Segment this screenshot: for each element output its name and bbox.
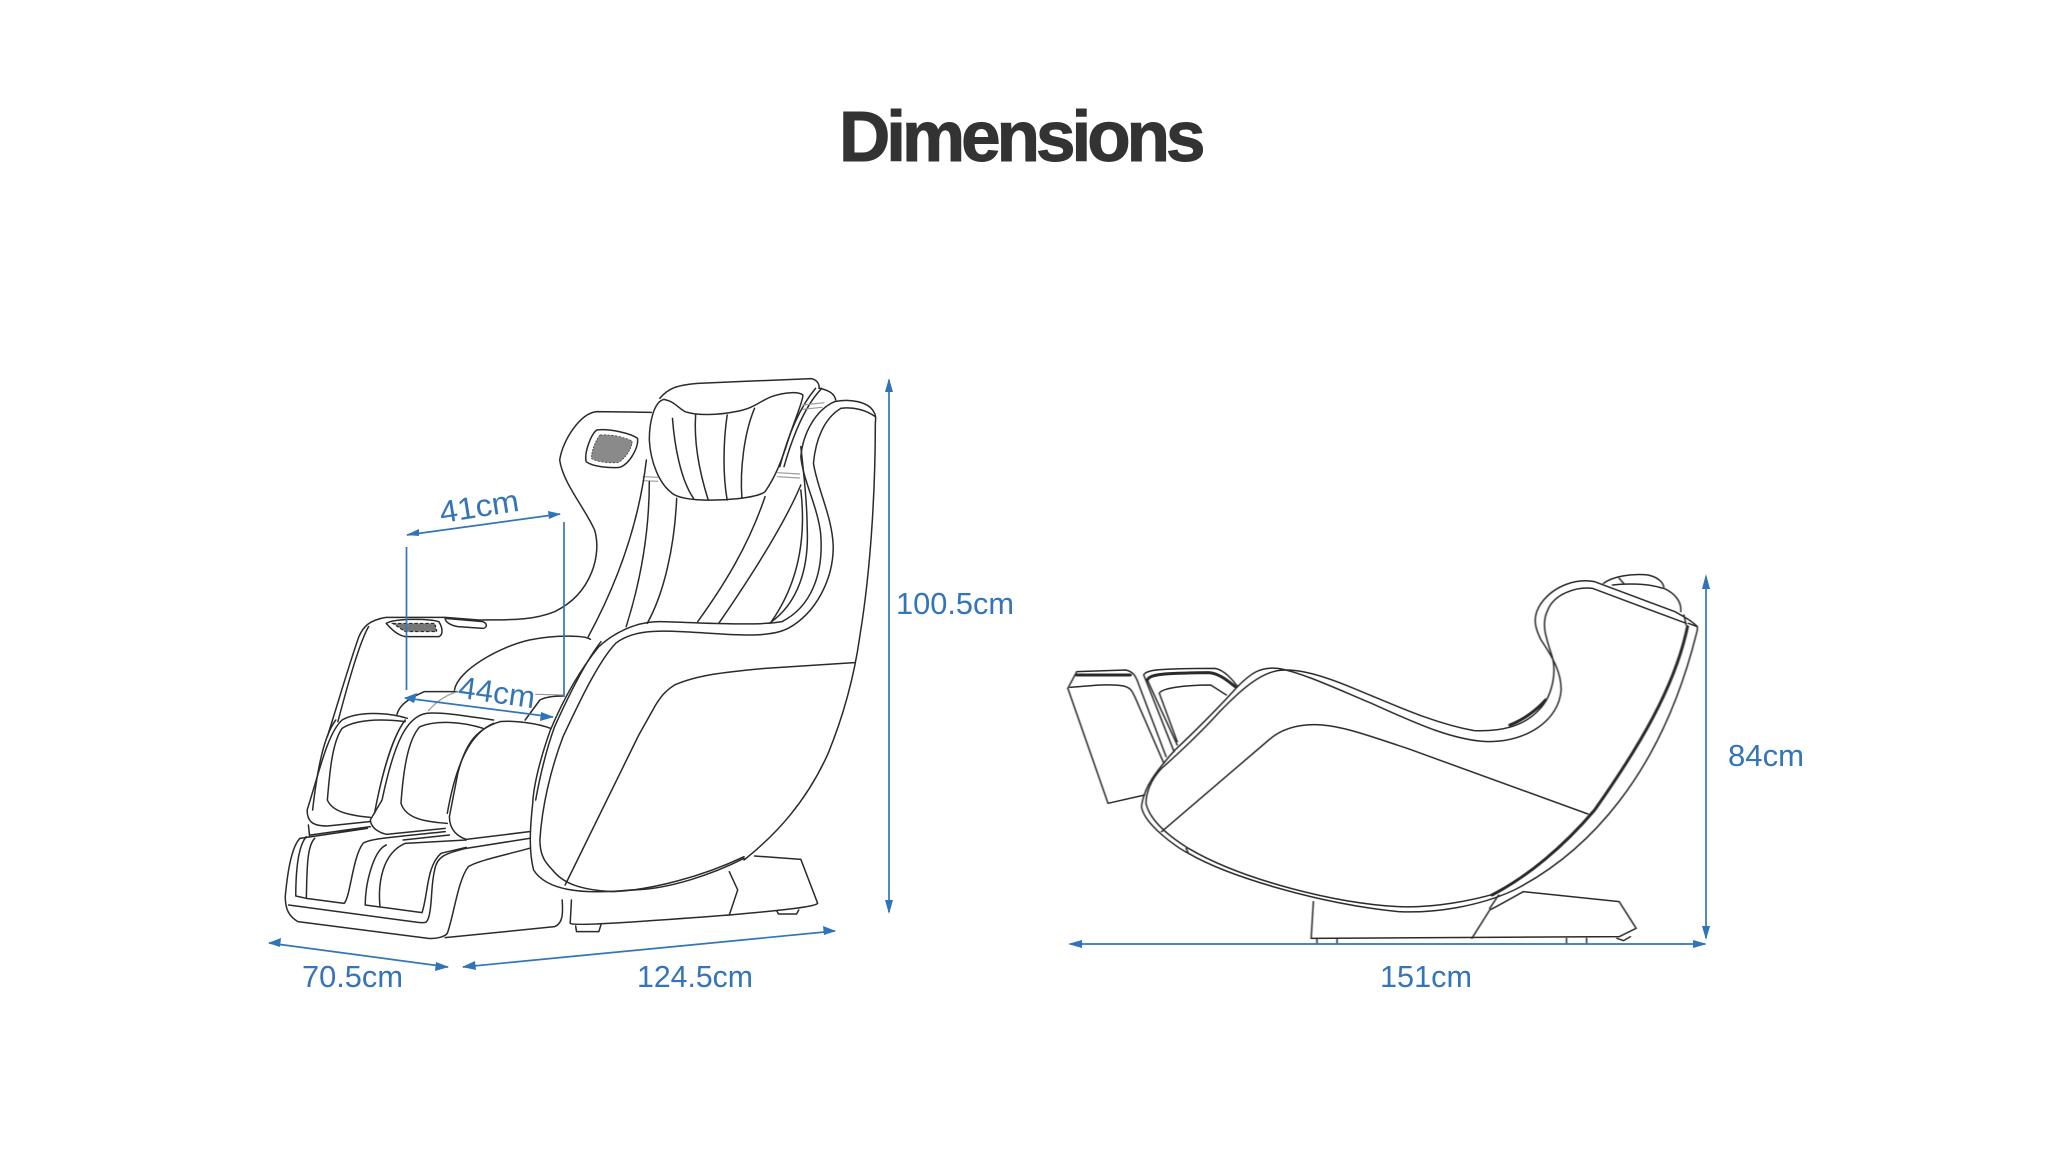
dimension: seat back width 41cm [406, 483, 564, 697]
dimension: front height 100.5cm [885, 378, 1014, 914]
dimension: reclined length 151cm [1068, 940, 1707, 994]
upper leg rests [307, 692, 563, 839]
dimension: width 70.5cm [268, 938, 449, 994]
head pillow [1604, 575, 1681, 612]
dimension: reclined length 151cm: 151cm [1380, 959, 1472, 994]
footrest [1068, 668, 1238, 803]
dimension: seat width 44cm [404, 670, 554, 721]
lower foot massager [285, 827, 529, 938]
dimension: reclined height 84cm: 84cm [1728, 738, 1804, 773]
side panel seam [1162, 725, 1588, 832]
dimension: front height 100.5cm: 100.5cm [896, 586, 1014, 621]
chair base and feet [445, 856, 818, 938]
shell outline [1142, 581, 1697, 912]
far side wing and armrest [327, 412, 651, 737]
headrest pillow [643, 379, 836, 500]
base [1311, 892, 1636, 944]
dimension: seat width 44cm: 44cm [456, 670, 537, 715]
dimension: seat back width 41cm: 41cm [437, 483, 521, 530]
side view of reclined massage chair [1068, 575, 1697, 944]
icon: speaker [586, 430, 638, 468]
dimension: reclined height 84cm [1702, 574, 1804, 940]
side shell outline [530, 400, 876, 892]
front three-quarter view of massage chair [285, 379, 876, 938]
title: Dimensions [839, 98, 1203, 177]
dimension: width 70.5cm: 70.5cm [302, 959, 403, 994]
backrest stripes [626, 447, 807, 627]
armrest controller [386, 618, 486, 637]
dimension: depth 124.5cm: 124.5cm [637, 959, 753, 994]
dimension: depth 124.5cm [462, 926, 836, 994]
